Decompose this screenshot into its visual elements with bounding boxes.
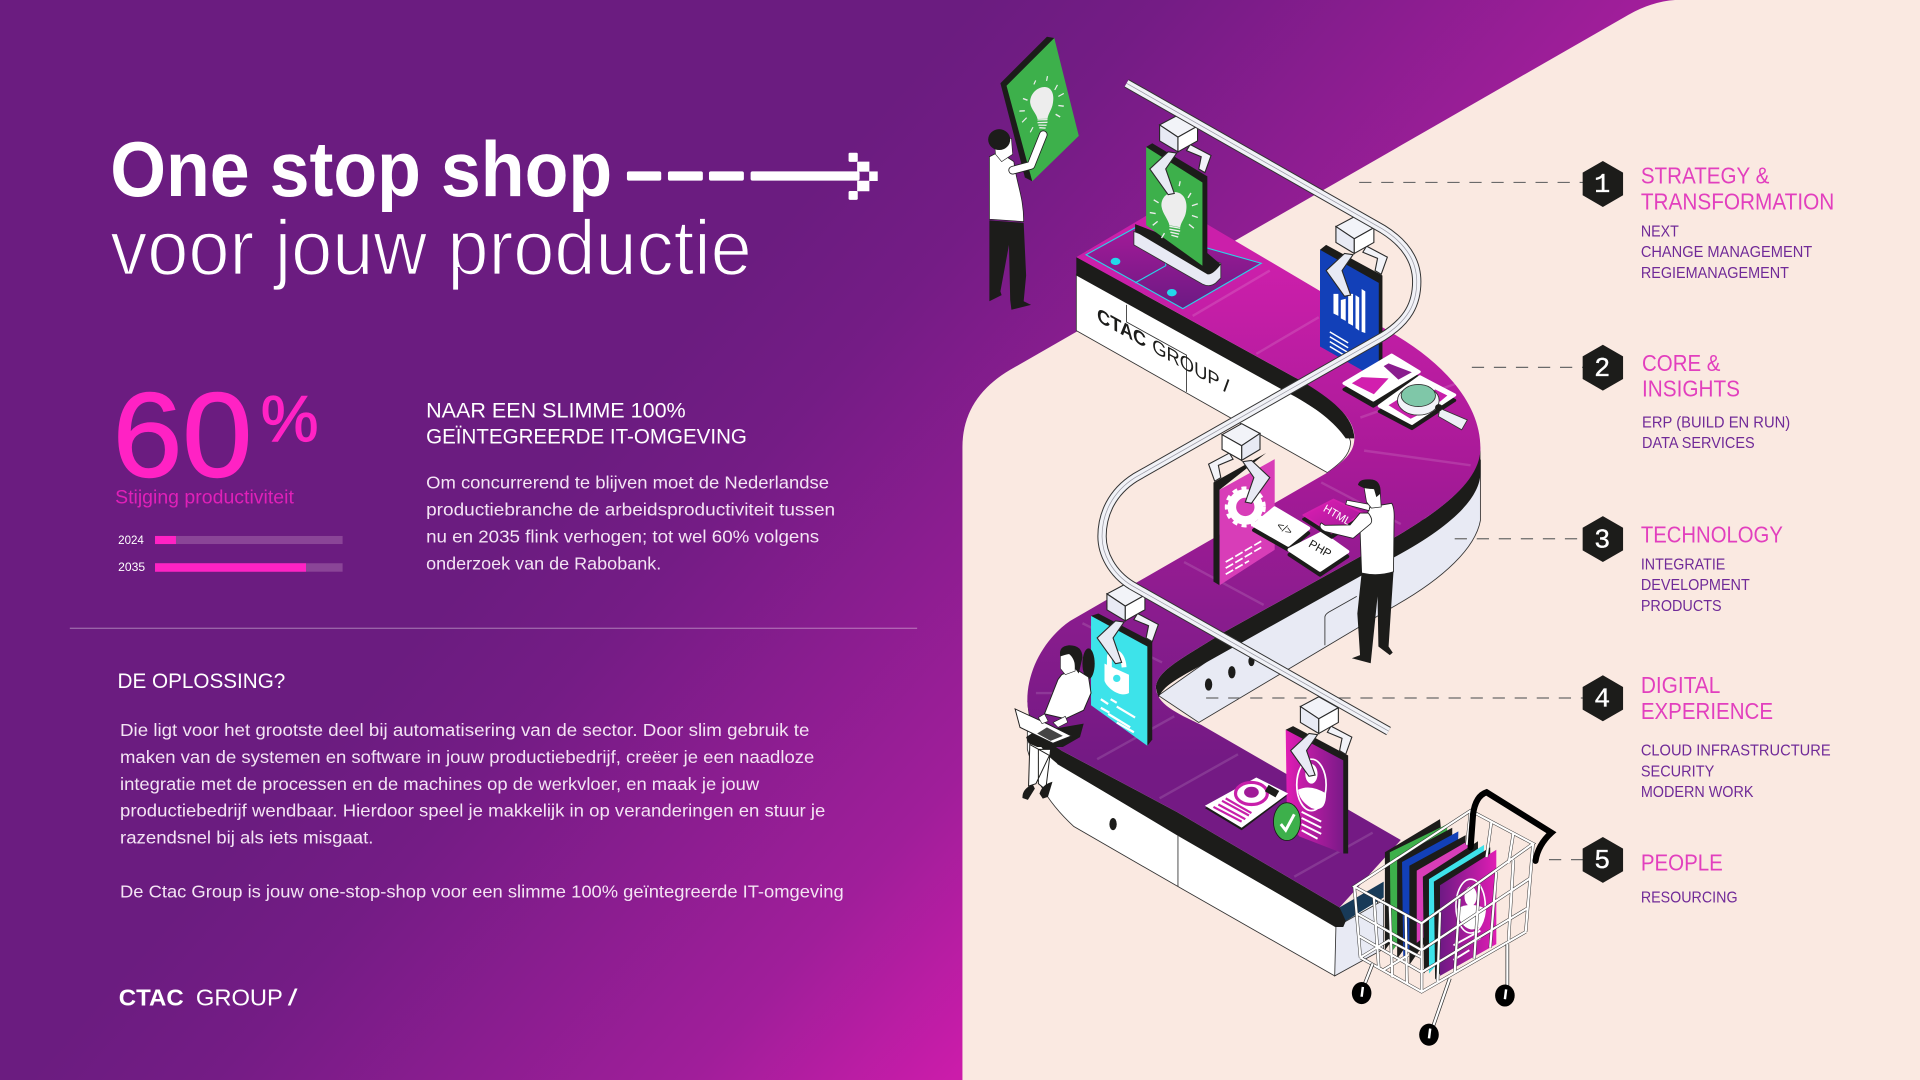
item 5 people: RESOURCING [1641,889,1738,906]
panel logo on wall [1097,304,1230,399]
item 1 strategy: REGIEMANAGEMENT [1641,265,1789,282]
statistic 60 percent [113,368,318,502]
item 4 digital [1583,672,1831,801]
hexagon 5: 5 [1594,847,1610,877]
cart handle [1471,792,1551,861]
cart back wires [1354,811,1533,992]
shopping cart [1352,792,1551,1046]
rail [1102,83,1417,731]
logo: GROUP [196,984,283,1010]
lower front wall [1027,722,1378,976]
person holding green panel [988,37,1079,310]
item 4 digital: SECURITY [1641,763,1715,780]
gear panel [1213,453,1275,585]
item 2 core: CORE & [1642,350,1721,376]
hexagon 4: 4 [1594,686,1610,716]
solution text [120,720,844,902]
intro heading [426,400,747,448]
hexagon 2 [1583,345,1623,391]
progress bars 2024 and 2035: 2024 [118,534,144,547]
surface seams [1036,271,1471,877]
solution text: De Ctac Group is jouw one-stop-shop voor een slimme 100% geïntegreerde IT-omgeving [120,882,844,902]
folders in cart [1385,819,1496,980]
cart legs [1362,944,1507,1035]
item 4 digital: DIGITAL [1641,672,1720,698]
right side wall [1158,460,1480,722]
black edge bands [1027,257,1480,927]
chart tiles and magnifier [1344,355,1467,430]
cart wheels [1352,982,1515,1046]
item 5 people [1583,837,1738,906]
arrow [627,153,878,200]
item 3 technology: TECHNOLOGY [1641,521,1783,547]
item 5 people: PEOPLE [1641,850,1723,876]
hexagon 3 [1583,516,1623,562]
hexagon 4 [1583,675,1623,721]
statistic 60 percent: % [261,382,318,455]
item 1 strategy [1583,161,1834,282]
robot claws [1097,115,1387,776]
code tiles: HTML [1321,503,1353,528]
hexagon 2: 2 [1594,355,1610,385]
title: voor jouw productie [110,203,752,291]
hexagon 1: 1 [1594,171,1610,201]
conveyor surface [1027,202,1480,907]
start tile [1086,228,1261,309]
intro heading: NAAR EEN SLIMME 100% [426,400,686,423]
item 3 technology: PRODUCTS [1641,598,1722,615]
cyan lock panel [1091,613,1152,746]
panel logo on wall: / [1223,374,1230,399]
intro text: nu en 2035 flink verhogen; tot wel 60% volgens [426,526,819,546]
logo: CTAC [119,984,184,1010]
blue chart panel [1320,245,1382,380]
item 1 strategy: STRATEGY & [1641,163,1770,189]
item 1 strategy: CHANGE MANAGEMENT [1641,244,1812,261]
person profile panel [1286,726,1348,853]
cream panel [962,0,1920,1080]
solution text: productiebedrijf wendbaar. Hierdoor speel je makkelijk in op veranderingen en stuur je [120,801,825,821]
dashed connector lines [1206,182,1584,860]
progress bars 2024 and 2035 [118,534,343,574]
green check badge [1273,803,1300,841]
hexagon 3: 3 [1594,526,1610,556]
item 3 technology: INTEGRATIE [1641,556,1725,573]
solution heading: DE OPLOSSING? [118,670,285,693]
code tiles: </> [1274,520,1294,538]
item 1 strategy: TRANSFORMATION [1641,188,1834,214]
solution text: Die ligt voor het grootste deel bij automatisering van de sector. Door slim gebruik te [120,720,810,740]
code tiles [1254,500,1363,575]
conveyor platform [1027,202,1480,976]
intro text: Om concurrerend te blijven moet de Nederlandse [426,473,829,493]
intro text: productiebranche de arbeidsproductiviteit tussen [426,500,835,520]
seated woman with laptop [1015,645,1095,798]
item 4 digital: EXPERIENCE [1641,698,1773,724]
upper white wall [1076,274,1351,473]
item 3 technology [1583,516,1783,615]
intro text: onderzoek van de Rabobank. [426,553,661,573]
item 2 core: DATA SERVICES [1642,435,1755,452]
title: One stop shop [110,125,612,213]
hexagon 5 [1583,837,1623,883]
cart front wires [1354,811,1533,992]
solution text: razendsnel bij als iets misgaat. [120,828,373,848]
item 2 core: ERP (BUILD EN RUN) [1642,414,1790,431]
hexagon 1 [1583,161,1623,207]
code tiles: PHP [1306,537,1334,561]
surface end strip [1340,882,1384,921]
logo: / [288,984,298,1010]
title [110,125,752,291]
item 2 core [1583,345,1790,452]
item 2 core: INSIGHTS [1642,376,1740,402]
statistic 60 percent: 60 [113,368,252,502]
item 4 digital: CLOUD INFRASTRUCTURE [1641,743,1831,760]
panel logo on wall: GROUP [1152,335,1220,393]
id card [1205,778,1288,830]
solution text: integratie met de processen en de machines op de werkvloer, en maak je jouw [120,774,759,794]
intro heading: GEÏNTEGREERDE IT-OMGEVING [426,425,747,448]
item 3 technology: DEVELOPMENT [1641,577,1750,594]
progress bars 2024 and 2035: 2035 [118,561,145,574]
person with tile [1320,479,1394,663]
panel logo on wall: CTAC [1097,304,1146,353]
solution text: maken van de systemen en software in jouw productiebedrijf, creëer je een naadloze [120,747,814,767]
logo [119,984,298,1010]
item 1 strategy: NEXT [1641,223,1679,240]
lower wall end [1335,900,1384,976]
item 4 digital: MODERN WORK [1641,784,1754,801]
intro text [426,473,835,573]
wall details [1109,305,1357,887]
green panel with base [1134,143,1221,286]
statistic caption: Stijging productiviteit [115,487,295,508]
